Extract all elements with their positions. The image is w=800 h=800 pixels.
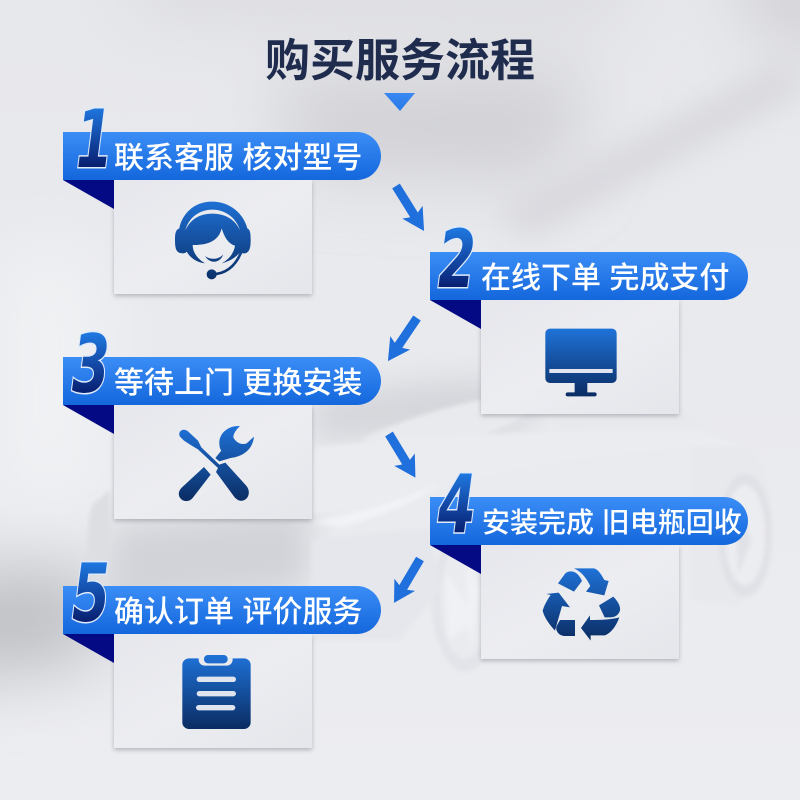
step 3 card: [114, 405, 312, 519]
step 3 label: 等待上门 更换安装: [114, 367, 362, 400]
panel: step 4 recycle old battery: [430, 459, 748, 659]
icon: monitor: [545, 329, 617, 396]
icon: clipboard: [182, 655, 251, 729]
car body sketch: [87, 388, 773, 672]
title: 购买服务流程: [265, 35, 535, 86]
step 1 ribbon fold: [63, 180, 114, 209]
icon: title down triangle: [384, 93, 415, 111]
panel: step 1 contact service: [63, 93, 381, 294]
panel: step 5 confirm and review: [63, 548, 381, 748]
step 2 label: 在线下单 完成支付: [481, 262, 729, 295]
arrow: step 2 to step 3: [378, 311, 427, 368]
panel: step 2 pay online: [430, 214, 748, 414]
step 4 number: 4: [437, 459, 476, 552]
step 2 ribbon: [430, 252, 748, 300]
step 1 ribbon: [63, 132, 381, 180]
step 4 ribbon: [430, 497, 748, 545]
icon: headset agent: [175, 202, 251, 279]
step 2 ribbon fold: [430, 300, 481, 329]
panel: step 3 on-site installation: [63, 319, 381, 519]
step 5 ribbon: [63, 586, 381, 634]
step 2 card: [481, 300, 679, 414]
step 3 ribbon: [63, 357, 381, 405]
step 3 ribbon fold: [63, 405, 114, 434]
step 5 number: 5: [72, 548, 110, 641]
step 1 number: 1: [76, 93, 113, 186]
arrow: step 1 to step 2: [386, 180, 434, 237]
step 4 label: 安装完成 旧电瓶回收: [482, 507, 742, 538]
step 5 card: [114, 634, 312, 748]
icon: recycle arrows: [543, 568, 620, 641]
step 1 card: [114, 180, 312, 294]
icon: screwdriver and wrench: [179, 426, 254, 501]
step 2 number: 2: [438, 214, 476, 307]
step 3 number: 3: [72, 319, 110, 412]
arrow: step 4 to step 5: [384, 553, 430, 609]
step 1 label: 联系客服 核对型号: [114, 142, 362, 175]
step 5 ribbon fold: [63, 634, 114, 663]
arrow: step 3 to step 4: [379, 428, 426, 484]
step 4 ribbon fold: [430, 545, 481, 574]
step 4 card: [481, 545, 679, 659]
step 5 label: 确认订单 评价服务: [114, 596, 362, 629]
